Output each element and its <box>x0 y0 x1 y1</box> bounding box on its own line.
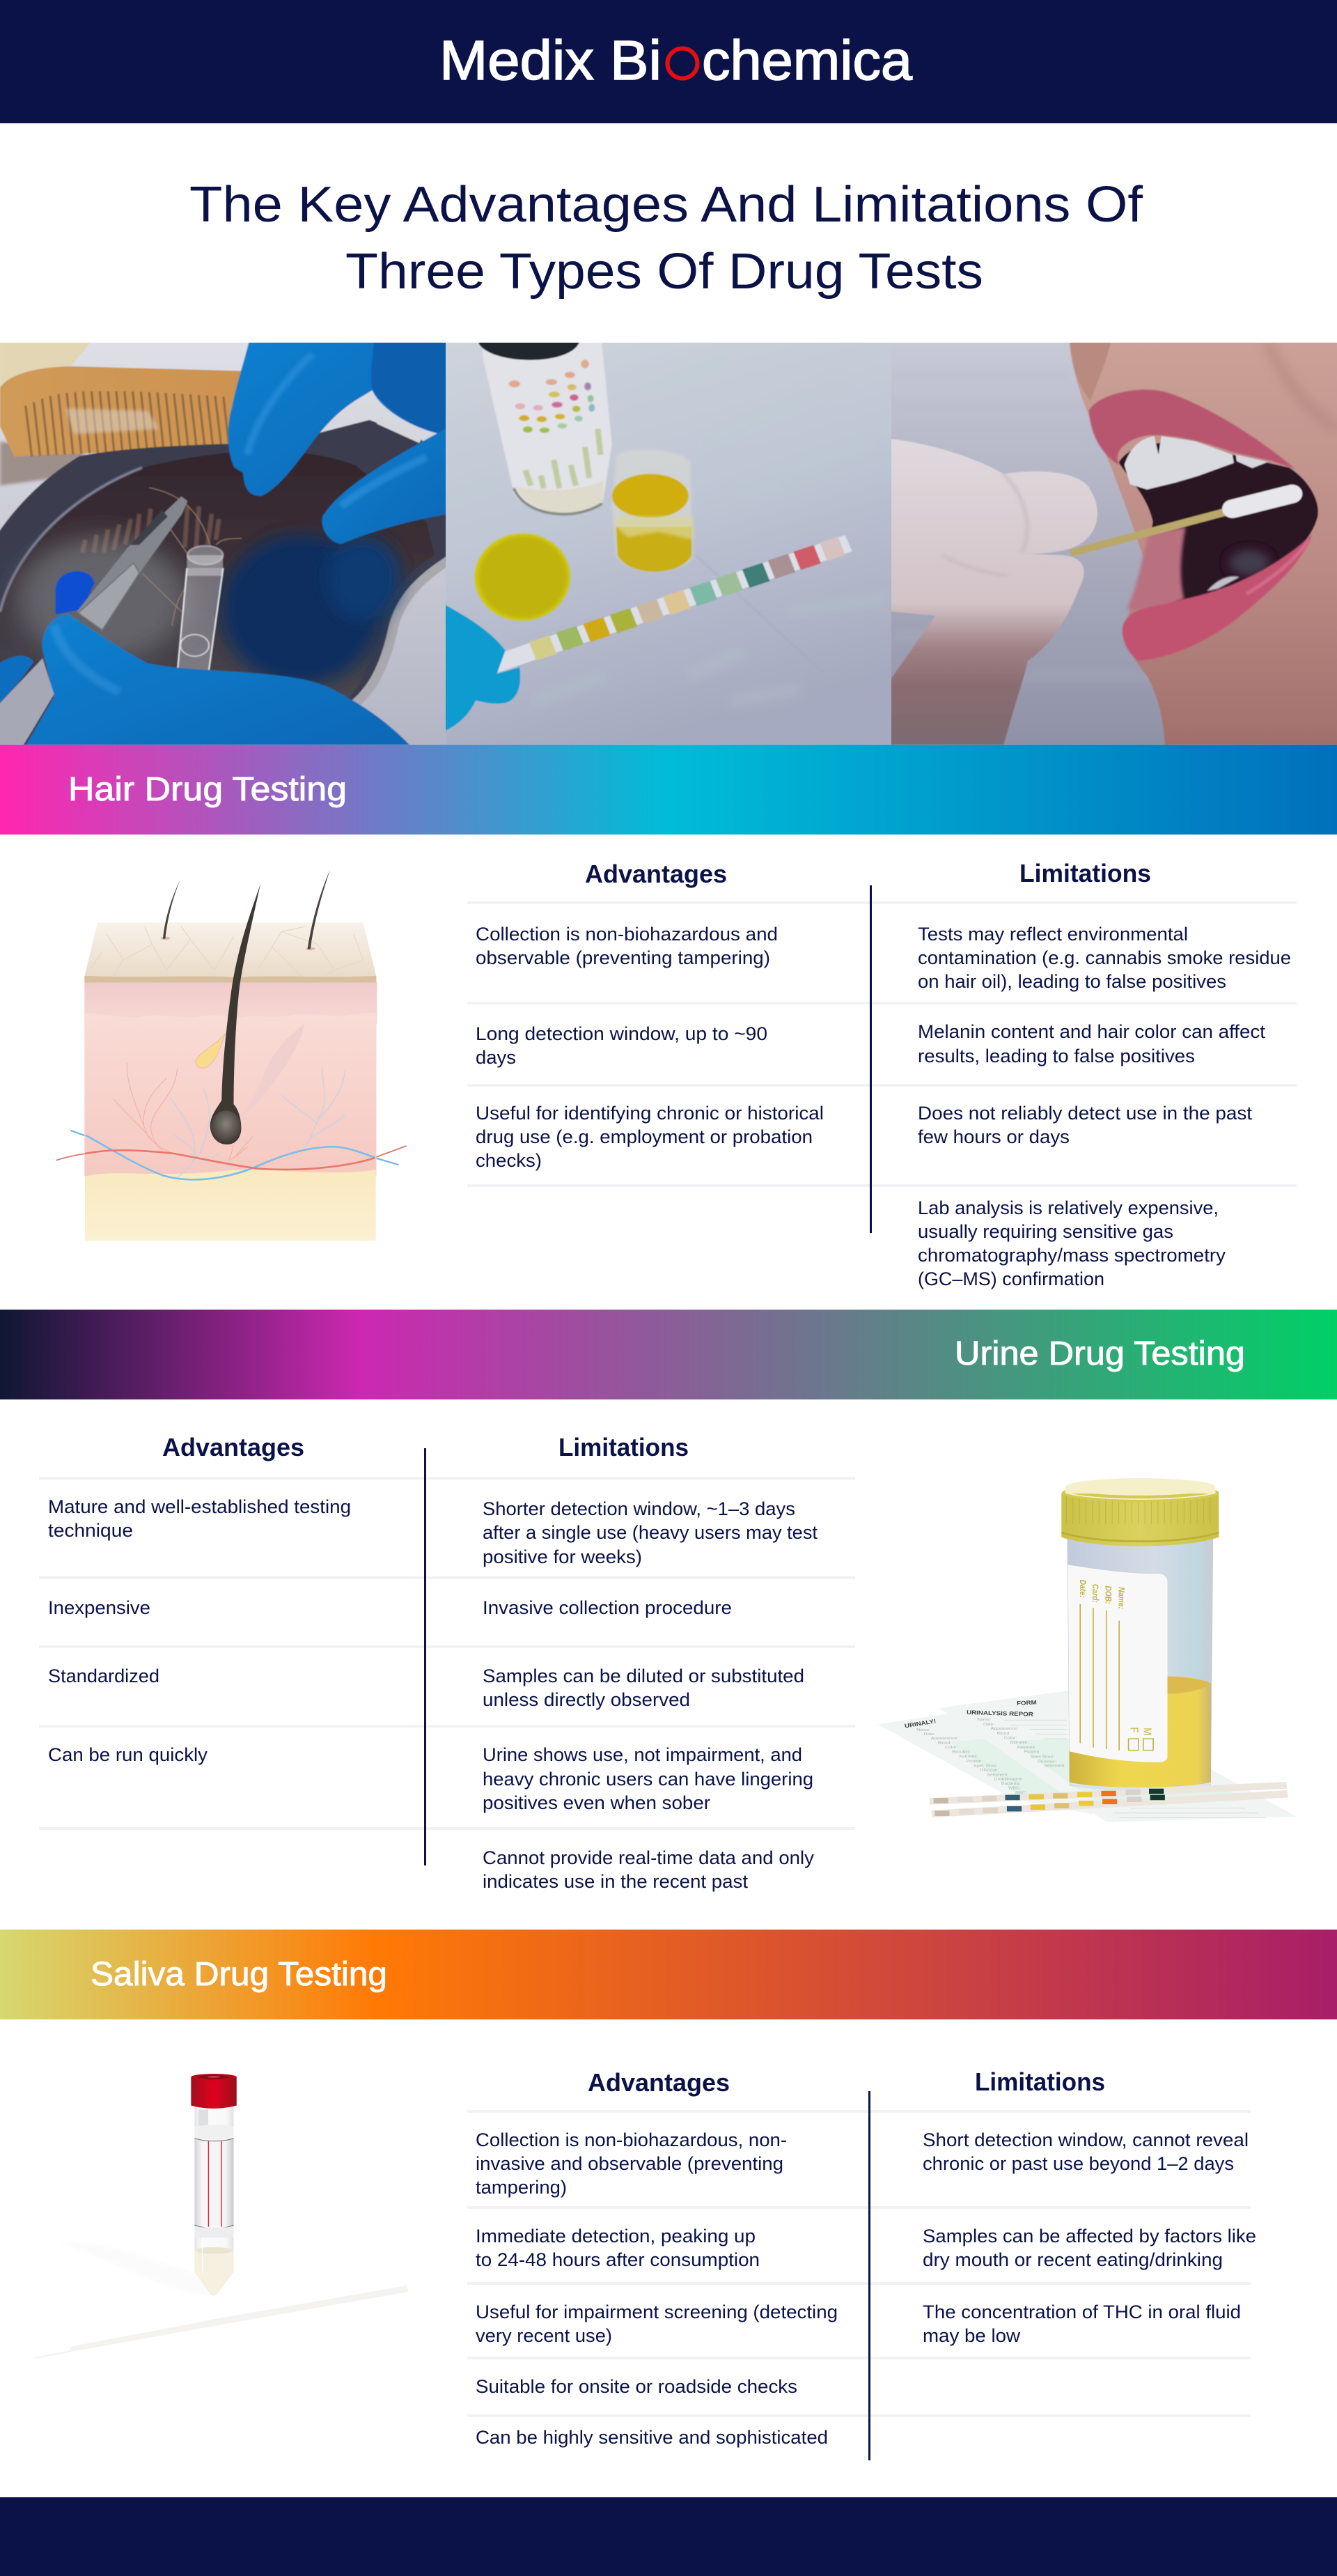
panel: urine limitations <box>483 1433 818 1892</box>
report forms: RBC: <box>1015 1791 1027 1795</box>
limitation text: hair 3: few hours or days <box>918 1126 1070 1147</box>
report forms: Bacteria: <box>1001 1782 1020 1786</box>
report forms: Spec Grav: <box>974 1764 998 1769</box>
report forms: Appearance: <box>931 1737 958 1741</box>
advantage text: saliva 3: Useful for impairment screening (detecting <box>476 2302 838 2322</box>
limitation text: saliva 3: may be low <box>923 2325 1021 2346</box>
limitation text: saliva 3: The concentration of THC in oral fluid <box>923 2302 1241 2322</box>
photo: urine dipstick <box>435 331 902 756</box>
limitation text: urine 1: positive for weeks) <box>483 1546 642 1567</box>
section band: urine drug testing <box>0 1310 1337 1399</box>
advantage text: hair 1: Collection is non-biohazardous and <box>476 924 778 945</box>
jar label text: Name: <box>1116 1587 1125 1609</box>
advantage text: urine 4: Can be run quickly <box>48 1744 208 1765</box>
illustration: hair follicle skin cross-section <box>56 869 406 1241</box>
jar label text: M <box>1141 1728 1153 1735</box>
jar body <box>1067 1537 1213 1791</box>
limitation text: hair 4: (GC–MS) confirmation <box>918 1268 1104 1289</box>
advantage text: saliva 2: Immediate detection, peaking up <box>476 2226 756 2247</box>
swab <box>33 2286 408 2359</box>
limitation text: urine 3: unless directly observed <box>483 1689 690 1710</box>
heading: limitations: Limitations <box>975 2067 1105 2096</box>
limitation text: hair 4: usually requiring sensitive gas <box>918 1221 1173 1242</box>
report forms: Ketones: <box>959 1754 978 1759</box>
heading: advantages: Advantages <box>588 2068 730 2097</box>
logo <box>439 29 913 91</box>
advantage text: saliva 5: Can be highly sensitive and sophisticated <box>476 2427 828 2448</box>
advantage text: hair 2: Long detection window, up to ~90 <box>476 1023 767 1044</box>
advantage text: hair 1: observable (preventing tampering) <box>476 947 770 968</box>
advantage text: saliva 1: invasive and observable (preventing <box>476 2153 783 2174</box>
report forms: Urobilinogen: <box>994 1777 1023 1781</box>
advantage text: urine 3: Standardized <box>48 1666 159 1686</box>
limitation text: saliva 1: Short detection window, cannot reveal <box>923 2129 1249 2150</box>
panel: saliva advantages <box>476 2068 838 2448</box>
report forms: Blood: <box>938 1741 952 1745</box>
logo: chemica <box>702 29 913 91</box>
advantage text: saliva 4: Suitable for onsite or roadside checks <box>476 2376 797 2397</box>
limitation text: hair 4: Lab analysis is relatively expensive, <box>918 1197 1219 1218</box>
limitation text: saliva 2: dry mouth or recent eating/drinking <box>923 2249 1223 2270</box>
report forms: Date: <box>923 1732 935 1737</box>
report forms <box>877 1691 1297 1822</box>
limitation text: saliva 2: Samples can be affected by factors like <box>923 2226 1256 2247</box>
jar label text: Date: <box>1078 1580 1087 1598</box>
report forms: Color: <box>945 1745 958 1750</box>
report forms: Protein: <box>967 1759 983 1764</box>
panel: hair advantages <box>476 860 824 1171</box>
report forms: Blood: <box>997 1731 1011 1736</box>
limitation text: urine 5: Cannot provide real-time data and only <box>483 1847 815 1868</box>
advantage text: saliva 2: to 24-48 hours after consumption <box>476 2249 760 2270</box>
report forms: Appearance: <box>991 1726 1018 1731</box>
header bar <box>0 0 1337 123</box>
report forms: Ketones: <box>1017 1745 1036 1750</box>
report forms: Casts: <box>1022 1795 1036 1799</box>
jar label text: F <box>1127 1728 1139 1733</box>
limitation text: urine 4: Urine shows use, not impairment, and <box>483 1744 802 1765</box>
title: Three Types Of Drug Tests <box>345 244 983 300</box>
report forms: Date: <box>983 1723 995 1727</box>
limitation text: urine 4: heavy chronic users can have lingering <box>483 1769 813 1790</box>
report forms: Sediment: <box>987 1773 1009 1777</box>
advantage text: hair 3: drug use (e.g. employment or probation <box>476 1126 813 1147</box>
limitation text: urine 3: Samples can be diluted or substituted <box>483 1666 804 1686</box>
report forms: Name: <box>977 1718 992 1722</box>
advantage text: saliva 1: tampering) <box>476 2177 567 2198</box>
report forms: Bilirubin: <box>952 1750 971 1755</box>
advantage text: urine 1: technique <box>48 1520 133 1541</box>
limitation text: urine 5: indicates use in the recent past <box>483 1871 749 1892</box>
section band: saliva drug testing <box>0 1930 1337 2019</box>
logo: Medix Bi <box>439 29 662 91</box>
report forms: Glucose: <box>980 1768 999 1772</box>
footer bar <box>0 2497 1337 2576</box>
section band: hair drug testing <box>0 745 1337 835</box>
report forms: FORM <box>1017 1699 1037 1707</box>
limitation text: saliva 1: chronic or past use beyond 1–2 days <box>923 2153 1234 2174</box>
report forms: Bilirubin: <box>1010 1740 1029 1745</box>
advantage text: hair 2: days <box>476 1047 516 1068</box>
limitation text: hair 2: Melanin content and hair color can affect <box>918 1021 1266 1042</box>
section band: hair drug testing: Hair Drug Testing <box>68 771 347 808</box>
illustration: urine sample jar with report and test strips <box>877 1478 1297 1822</box>
limitation text: hair 4: chromatography/mass spectrometry <box>918 1245 1226 1266</box>
section band: saliva drug testing: Saliva Drug Testing <box>91 1956 387 1993</box>
limitation text: urine 1: Shorter detection window, ~1–3 days <box>483 1498 795 1519</box>
urine test strips <box>930 1782 1288 1817</box>
report forms: Color: <box>1004 1736 1017 1741</box>
section band: urine drug testing: Urine Drug Testing <box>955 1335 1245 1372</box>
advantage text: urine 2: Inexpensive <box>48 1597 150 1618</box>
limitation text: hair 1: contamination (e.g. cannabis smoke residue <box>918 947 1291 968</box>
jar label text <box>1078 1580 1153 1751</box>
heading: advantages: Advantages <box>585 860 727 888</box>
advantage text: urine 1: Mature and well-established testing <box>48 1496 351 1517</box>
advantage text: saliva 3: very recent use) <box>476 2325 612 2346</box>
red tube cap <box>191 2074 237 2109</box>
jar lid <box>1061 1478 1219 1546</box>
limitation text: hair 1: on hair oil), leading to false positives <box>918 971 1226 992</box>
limitation text: urine 1: after a single use (heavy users may test <box>483 1522 818 1543</box>
advantage text: hair 3: Useful for identifying chronic or historical <box>476 1103 824 1124</box>
advantage text: hair 3: checks) <box>476 1150 542 1171</box>
limitation text: hair 1: Tests may reflect environmental <box>918 924 1188 945</box>
panel: urine advantages <box>48 1433 351 1765</box>
panel: saliva limitations <box>923 2067 1256 2346</box>
photo: oral swab <box>880 331 1337 756</box>
report forms: Name: <box>916 1728 931 1732</box>
heading: limitations: Limitations <box>1019 859 1151 887</box>
report forms: Sediment: <box>1044 1764 1065 1769</box>
report forms: URINALYSIS REPOR <box>967 1709 1034 1718</box>
report forms: Protein: <box>1024 1750 1041 1755</box>
limitation text: hair 2: results, leading to false positives <box>918 1046 1195 1066</box>
illustration: saliva collection tube and swab <box>33 2074 408 2359</box>
jar label text: DOB: <box>1103 1585 1112 1604</box>
limitation text: urine 2: Invasive collection procedure <box>483 1597 732 1618</box>
report forms: Spec Grav: <box>1030 1755 1054 1759</box>
heading: limitations: Limitations <box>558 1433 689 1461</box>
advantage text: saliva 1: Collection is non-biohazardous, non- <box>476 2129 787 2150</box>
report forms: Glucose: <box>1038 1760 1056 1764</box>
photo: hair sample collection <box>0 331 457 756</box>
jar label text: Card: <box>1090 1584 1100 1603</box>
collection tube <box>194 2106 233 2296</box>
heading: advantages: Advantages <box>162 1433 304 1461</box>
limitation text: hair 3: Does not reliably detect use in the past <box>918 1103 1253 1124</box>
limitation text: urine 4: positives even when sober <box>483 1792 710 1813</box>
title: The Key Advantages And Limitations Of <box>189 177 1143 233</box>
report forms: WBC: <box>1008 1786 1021 1790</box>
title <box>189 177 1143 300</box>
report forms: URINALY! <box>904 1718 937 1729</box>
panel: hair limitations <box>918 859 1291 1289</box>
